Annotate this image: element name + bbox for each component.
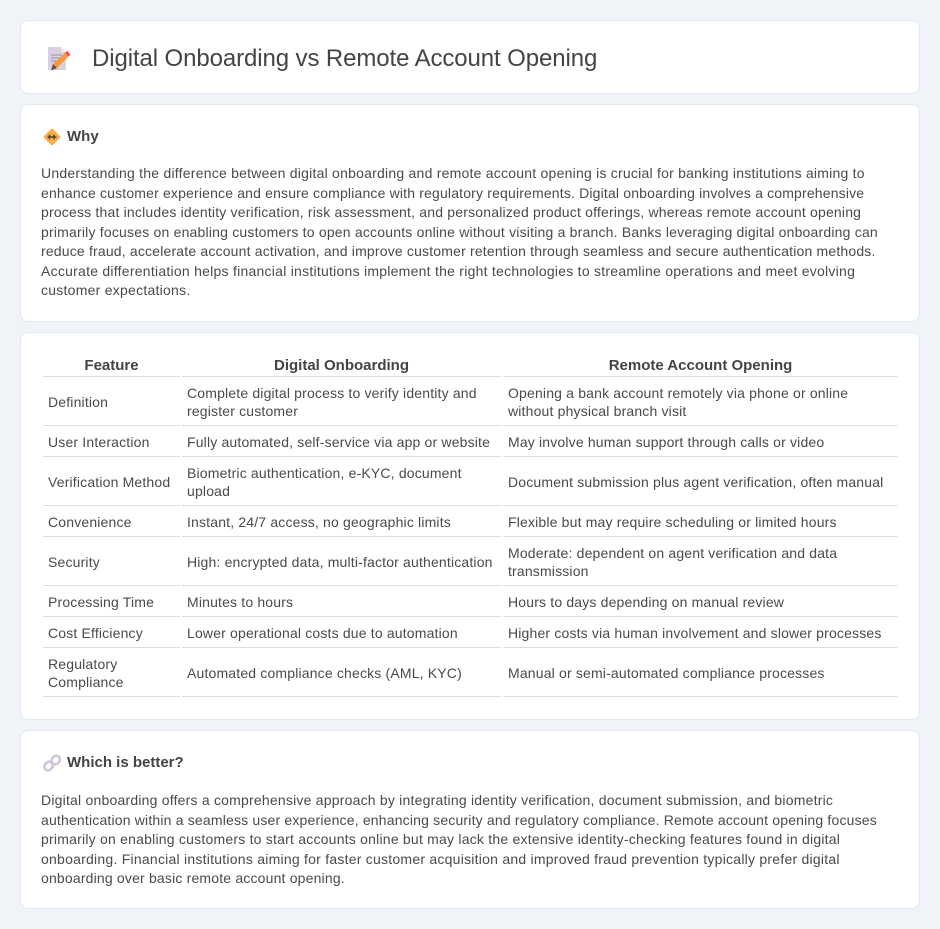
icon: memo with pencil	[48, 47, 70, 70]
text block: verdict	[41, 792, 877, 886]
text block: why explanation: customer expectations.	[41, 282, 190, 298]
row: verification method	[43, 465, 898, 506]
row: cost efficiency: Cost Efficiency	[48, 625, 143, 641]
row: regulatory compliance: Manual or semi-automated compliance processes	[508, 665, 825, 681]
row: security: Security	[48, 554, 100, 570]
text block: why explanation: enhance customer experience and ensure compliance with regulatory requirements. Digital onboarding involves a comprehensive	[41, 184, 864, 200]
row: definition: register customer	[187, 403, 298, 419]
row: convenience: Flexible but may require scheduling or limited hours	[508, 514, 837, 530]
row: processing time	[43, 594, 898, 617]
text block: why explanation: reduce fraud, accelerate account activation, and improve customer retention through seamless and secure authentication methods.	[41, 243, 876, 259]
text block: verdict: primarily on enabling customers to start accounts online but may lack the extensive identity-checking features found in digital	[41, 831, 840, 847]
icon: chain link	[43, 754, 61, 772]
row: verification method: Biometric authentication, e-KYC, document	[187, 465, 462, 481]
row: security: High: encrypted data, multi-factor authentication	[187, 554, 493, 570]
text block: why explanation: Accurate differentiation helps financial institutions implement the right technologies to streamline operations and meet evolving	[41, 262, 855, 278]
panel: why	[20, 104, 920, 322]
row: security	[43, 545, 898, 586]
row: security: Moderate: dependent on agent verification and data	[508, 545, 837, 561]
heading: why: Why	[67, 128, 99, 145]
row: definition: without physical branch visit	[508, 403, 686, 419]
row: definition: Opening a bank account remotely via phone or online	[508, 385, 848, 401]
row: regulatory compliance: Compliance	[48, 674, 124, 690]
icon: orange diamond sign	[44, 128, 60, 146]
panel: which is better	[20, 730, 920, 909]
row: processing time: Minutes to hours	[187, 594, 293, 610]
panel: comparison table	[20, 332, 920, 720]
row: verification method: Document submission plus agent verification, often manual	[508, 474, 883, 490]
row: user interaction	[43, 434, 898, 457]
row: convenience	[43, 514, 898, 537]
text block: why explanation	[41, 165, 878, 298]
row: convenience: Convenience	[48, 514, 132, 530]
row: definition: Complete digital process to verify identity and	[187, 385, 477, 401]
row: verification method: upload	[187, 483, 230, 499]
text block: why explanation: Understanding the difference between digital onboarding and remote account opening is crucial for banking institutions aiming to	[41, 165, 865, 181]
text block: why explanation: primarily focuses on enabling customers to open accounts online without visiting a branch. Banks leveraging digital onboarding can	[41, 224, 878, 240]
row: cost efficiency: Higher costs via human involvement and slower processes	[508, 625, 882, 641]
panel: title header	[20, 20, 920, 94]
row: convenience: Instant, 24/7 access, no geographic limits	[187, 514, 451, 530]
title: Digital Onboarding vs Remote Account Opening	[92, 45, 597, 72]
table header row: Remote Account Opening	[609, 357, 792, 374]
row: definition: Definition	[48, 394, 108, 410]
table header row	[43, 357, 898, 697]
row: processing time: Hours to days depending on manual review	[508, 594, 784, 610]
text block: why explanation: process that includes identity verification, risk assessment, and personalized product offerings, whereas remote account opening	[41, 204, 861, 220]
row: regulatory compliance: Regulatory	[48, 656, 117, 672]
row: user interaction: Fully automated, self-service via app or website	[187, 434, 490, 450]
row: processing time: Processing Time	[48, 594, 154, 610]
row: cost efficiency: Lower operational costs due to automation	[187, 625, 458, 641]
row: user interaction: May involve human support through calls or video	[508, 434, 824, 450]
row: definition	[43, 385, 898, 426]
text block: verdict: Digital onboarding offers a comprehensive approach by integrating identity verification, document submission, and biometric	[41, 792, 833, 808]
row: cost efficiency	[43, 625, 898, 648]
row: user interaction: User Interaction	[48, 434, 150, 450]
table header row: Digital Onboarding	[274, 357, 409, 374]
row: verification method: Verification Method	[48, 474, 170, 490]
row: security: transmission	[508, 563, 589, 579]
row: regulatory compliance: Automated compliance checks (AML, KYC)	[187, 665, 462, 681]
table header row: Feature	[84, 357, 139, 374]
row: regulatory compliance	[43, 656, 898, 697]
text block: verdict: onboarding. Financial institutions aiming for faster customer acquisition and improved fraud prevention typically prefer digital	[41, 850, 840, 866]
text block: verdict: authentication within a seamless user experience, enhancing security and regulatory compliance. Remote account opening focuses	[41, 812, 877, 828]
text block: verdict: onboarding over basic remote account opening.	[41, 870, 345, 886]
comparison table	[43, 357, 898, 697]
heading: which is better: Which is better?	[67, 754, 184, 771]
